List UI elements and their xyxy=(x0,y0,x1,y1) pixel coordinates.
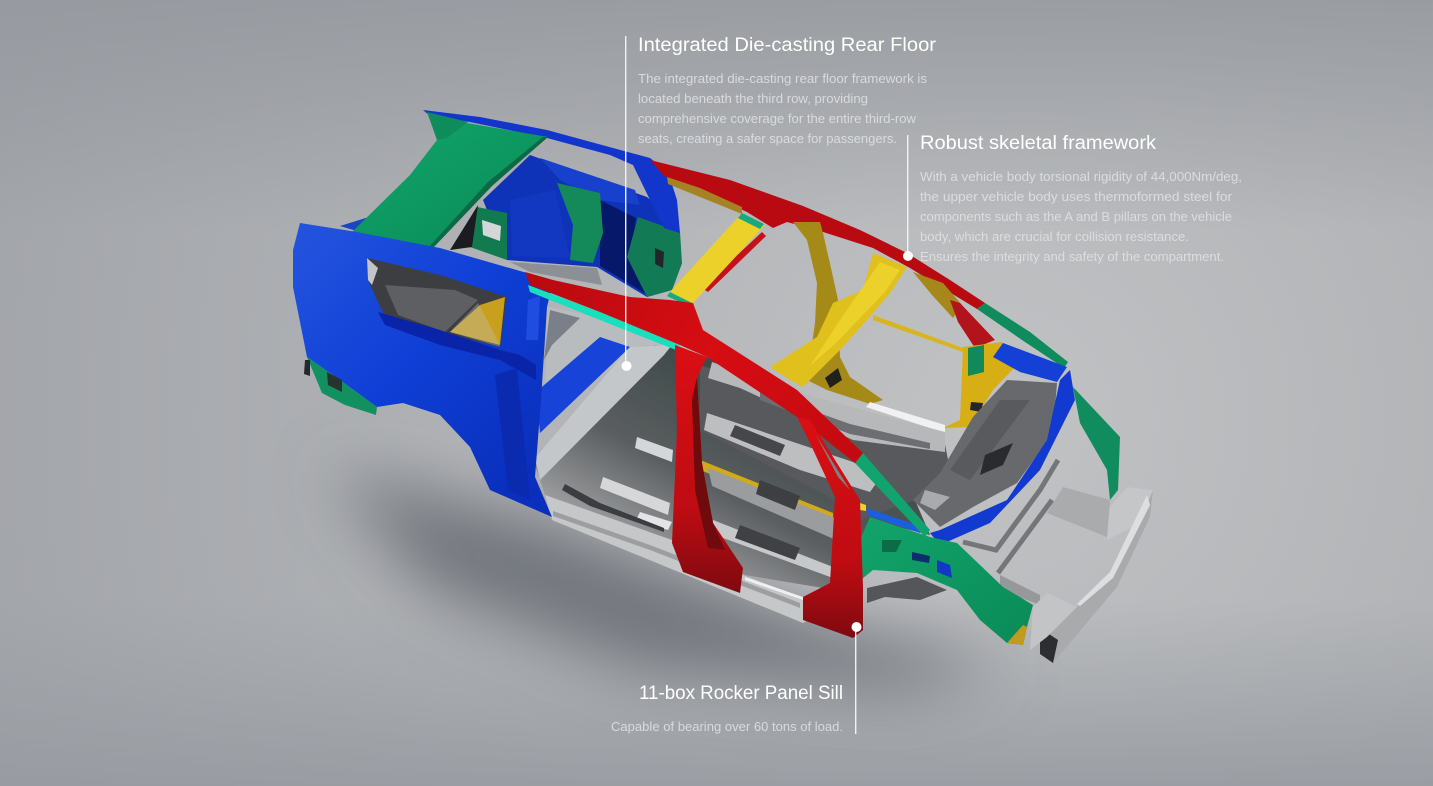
far interior green pillar xyxy=(557,183,603,263)
leader: 11-box Rocker Panel Sill xyxy=(852,622,862,734)
near sill xyxy=(545,495,830,623)
middle cross bar xyxy=(704,413,880,492)
far-side rear interior xyxy=(450,155,682,297)
text block: 11-box Rocker Panel Sill xyxy=(611,682,843,734)
text block: Integrated Die-casting Rear Floor: Integrated Die-casting Rear Floor xyxy=(638,34,936,56)
text block: 11-box Rocker Panel Sill: Capable of bearing over 60 tons of load. xyxy=(611,719,843,734)
text block: Robust skeletal framework: Robust skeletal framework xyxy=(920,132,1156,154)
teal strip xyxy=(528,285,680,350)
ground shadow xyxy=(330,470,1010,690)
window lower shadow ledge xyxy=(378,312,536,380)
text block: Robust skeletal framework: the upper vehicle body uses thermoformed steel for xyxy=(920,189,1233,204)
blue front header xyxy=(993,343,1067,382)
near rear window xyxy=(367,258,507,347)
bronze far top rail xyxy=(667,177,742,214)
far green fender xyxy=(1073,387,1120,500)
near rear body xyxy=(293,223,553,517)
lower cross bar xyxy=(712,520,833,578)
bright yellow far pillar xyxy=(770,253,963,388)
text block: Integrated Die-casting Rear Floor: comprehensive coverage for the entire third-row xyxy=(638,111,916,126)
door well: silver strip xyxy=(535,345,672,480)
text block: Robust skeletal framework: body, which are crucial for collision resistance. xyxy=(920,229,1189,244)
text block: Robust skeletal framework: Ensures the integrity and safety of the compartment. xyxy=(920,249,1224,264)
roof green panel xyxy=(352,112,548,248)
text block: 11-box Rocker Panel Sill: 11-box Rocker Panel Sill xyxy=(639,682,843,704)
text block: Robust skeletal framework: With a vehicle body torsional rigidity of 44,000Nm/deg, xyxy=(920,169,1242,184)
near green fender xyxy=(852,503,1033,645)
leader: Robust skeletal framework xyxy=(903,135,913,261)
floor silver brackets xyxy=(635,437,673,462)
green roof rail front xyxy=(977,303,1068,368)
text block: Integrated Die-casting Rear Floor: The integrated die-casting rear floor framework is xyxy=(638,71,927,86)
red roof rail xyxy=(650,160,985,309)
front bumper structure xyxy=(867,460,1153,663)
text block: Robust skeletal framework: components such as the A and B pillars on the vehicle xyxy=(920,209,1232,224)
blue rear upper side xyxy=(340,216,372,232)
door well: blue floor panel xyxy=(536,337,630,433)
green windshield pillar xyxy=(855,453,930,537)
olive far B pillar xyxy=(793,222,883,404)
blue strip xyxy=(867,508,922,533)
radiator frame xyxy=(963,460,1058,573)
firewall dark floor xyxy=(913,380,1057,527)
floor xyxy=(535,307,950,623)
far sill white edge xyxy=(866,402,945,433)
front far A pillar xyxy=(913,272,1015,428)
car body skeleton xyxy=(293,110,1153,663)
text block: Integrated Die-casting Rear Floor xyxy=(638,34,936,146)
near red frame xyxy=(525,272,863,638)
rear pillar groove xyxy=(495,368,530,500)
rear lower green corner xyxy=(304,357,377,415)
blue far D-pillar and roof rail xyxy=(423,110,680,233)
floor dark ribs xyxy=(562,484,664,532)
door well: inner wall xyxy=(545,307,680,420)
floor far section xyxy=(700,365,950,520)
far interior green frame xyxy=(470,207,507,260)
text block: Integrated Die-casting Rear Floor: seats, creating a safer space for passengers. xyxy=(638,131,897,146)
text block: Robust skeletal framework xyxy=(920,132,1242,264)
far sill silver xyxy=(708,362,945,452)
far yellow pillar xyxy=(667,213,766,306)
yellow cross bar xyxy=(692,456,833,522)
leader: Integrated Die-casting Rear Floor xyxy=(622,36,632,371)
blue cowl arc xyxy=(930,370,1075,545)
far interior green D pillar xyxy=(627,217,682,297)
text block: Integrated Die-casting Rear Floor: located beneath the third row, providing xyxy=(638,91,868,106)
far interior window xyxy=(482,220,501,241)
